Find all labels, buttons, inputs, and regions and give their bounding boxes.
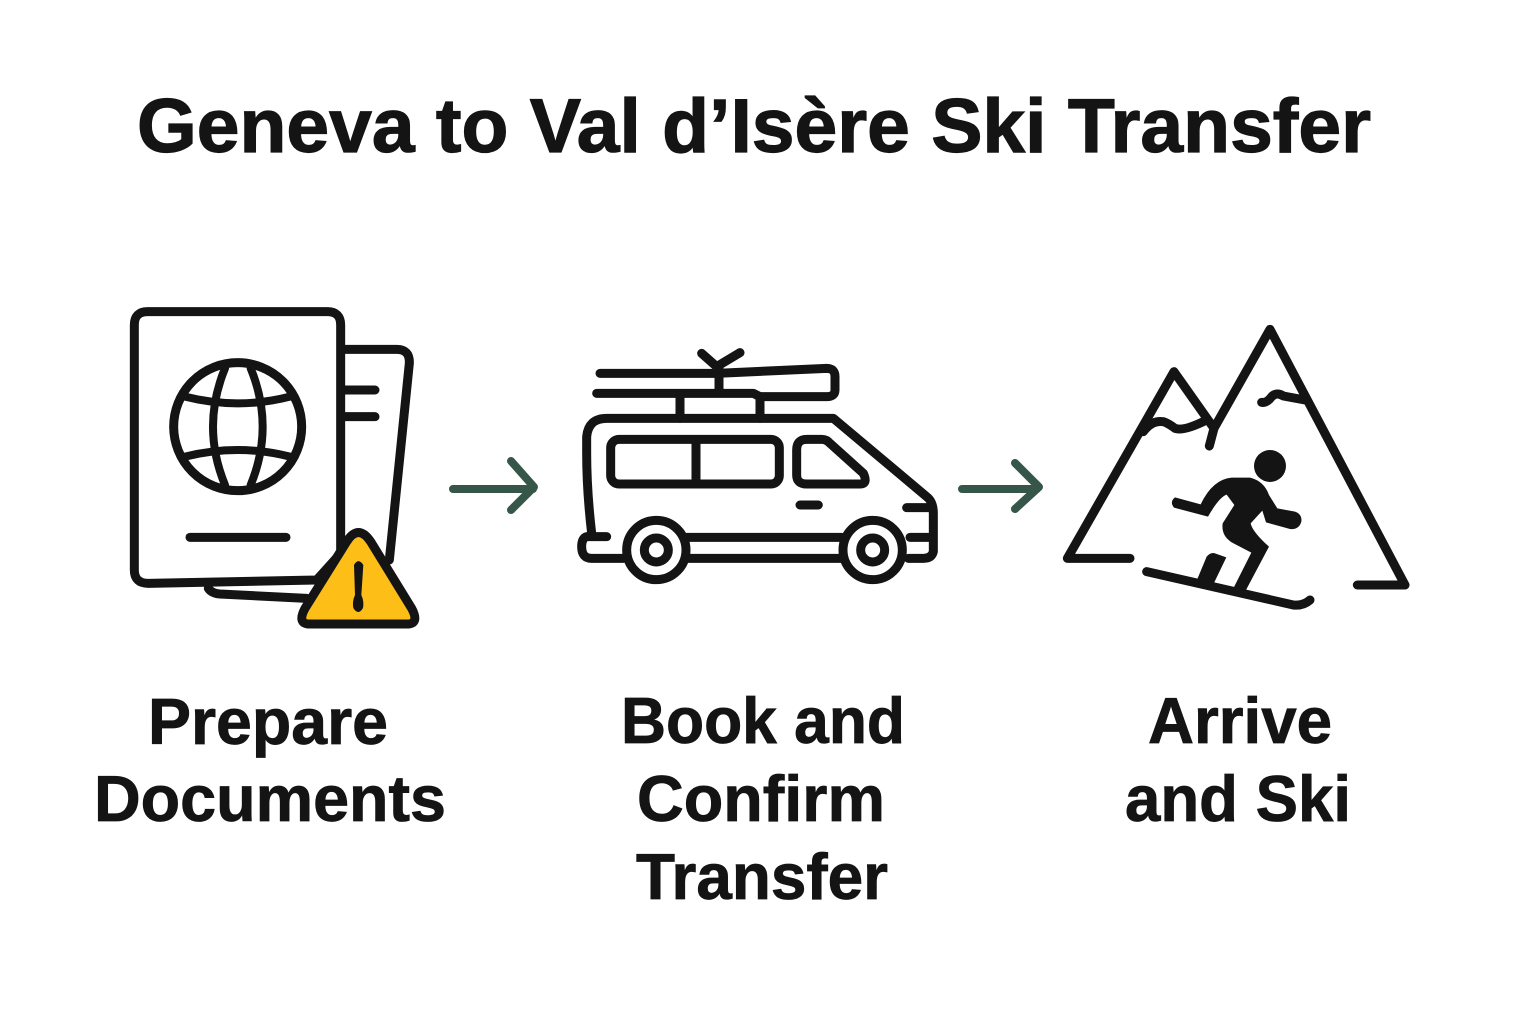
step 1 label: Documents <box>94 762 446 835</box>
back leg <box>1197 553 1226 585</box>
step 1 label: Prepare <box>148 685 388 758</box>
bumpers and sills <box>582 505 932 558</box>
title: Geneva to Val d’Isère Ski Transfer <box>137 84 1371 169</box>
snow line left <box>1143 420 1207 432</box>
arrow 2 <box>962 463 1039 509</box>
roof rack <box>680 395 760 418</box>
globe <box>174 363 302 491</box>
passport line <box>190 524 286 551</box>
lower sheet <box>208 588 307 598</box>
step 3 label <box>1125 684 1351 835</box>
step 3 label: and Ski <box>1125 762 1351 835</box>
icon: skier and mountains <box>1067 329 1405 605</box>
icon: passport and documents with warning <box>134 312 415 624</box>
step 2 label <box>621 684 905 913</box>
step 2 label: Book and <box>621 684 905 757</box>
step 1 label <box>94 685 446 835</box>
head <box>1254 450 1286 482</box>
snowboard <box>1147 572 1310 605</box>
skis <box>597 353 835 397</box>
mountain outline <box>1067 329 1405 585</box>
exclamation mark <box>353 561 363 612</box>
window divider <box>682 439 709 484</box>
rear wheel <box>627 520 686 580</box>
arrow 1 <box>453 461 534 510</box>
warning triangle <box>302 532 415 624</box>
back document <box>345 349 409 560</box>
van body <box>587 418 933 558</box>
step 3 label: Arrive <box>1148 684 1332 757</box>
front wheel <box>843 520 902 580</box>
snow line right <box>1262 394 1305 402</box>
front window <box>797 439 865 484</box>
passport cover <box>134 312 341 583</box>
side windows <box>611 439 779 484</box>
skier body <box>1172 478 1301 591</box>
step 2 label: Confirm <box>637 762 885 835</box>
step 2 label: Transfer <box>636 840 888 913</box>
icon: van with skis on roof <box>582 353 933 580</box>
